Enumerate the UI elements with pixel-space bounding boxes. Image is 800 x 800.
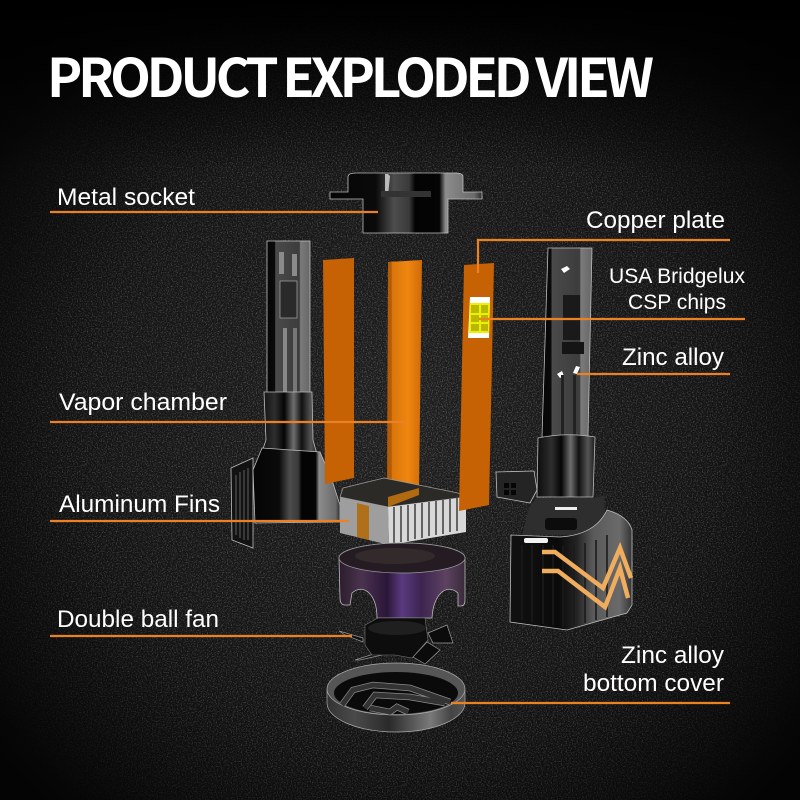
callout: double ball fan: Double ball fan — [57, 606, 219, 633]
right bulb neck — [537, 435, 595, 497]
part: aluminum fins — [340, 478, 466, 545]
callout: aluminum fins: Aluminum Fins — [59, 491, 220, 518]
part: vapor chamber plates — [323, 258, 422, 497]
part: right bulb — [496, 248, 632, 630]
plate left — [323, 258, 354, 484]
callout: zinc alloy bottom cover: Zinc alloy — [621, 642, 724, 669]
left bulb collar — [260, 392, 318, 458]
part: copper plate with chips — [459, 263, 494, 511]
right bulb body — [510, 510, 632, 630]
callout: zinc alloy bottom cover: bottom cover — [583, 670, 724, 697]
right bulb stripes — [522, 535, 607, 627]
right bulb mid section — [522, 495, 612, 535]
callout: vapor chamber: Vapor chamber — [59, 389, 227, 416]
left bulb arm — [267, 241, 310, 396]
part: left bulb half — [231, 241, 340, 548]
chip array — [468, 297, 490, 338]
title: PRODUCT EXPLODED VIEW — [47, 37, 654, 113]
callout: USA Bridgelux CSP chips: USA Bridgelux — [609, 265, 745, 288]
right bulb arm — [542, 248, 592, 437]
right bulb chevrons — [542, 548, 631, 607]
part: bottom cover — [327, 663, 465, 732]
callout: copper plate: Copper plate — [586, 207, 725, 234]
part: metal socket — [330, 173, 482, 233]
callout: USA Bridgelux CSP chips — [479, 265, 745, 319]
plate center — [387, 260, 422, 497]
left bulb shroud — [231, 458, 253, 548]
part: double ball fan — [339, 618, 453, 664]
left bulb body — [253, 448, 340, 523]
callout: copper plate — [478, 207, 730, 273]
callout: metal socket: Metal socket — [57, 184, 195, 211]
right bulb connector — [496, 471, 537, 503]
callout: zinc alloy: Zinc alloy — [622, 344, 724, 371]
part: purple fan housing — [339, 543, 465, 618]
callout: zinc alloy bottom cover — [451, 642, 730, 703]
callout: USA Bridgelux CSP chips: CSP chips — [628, 291, 726, 314]
